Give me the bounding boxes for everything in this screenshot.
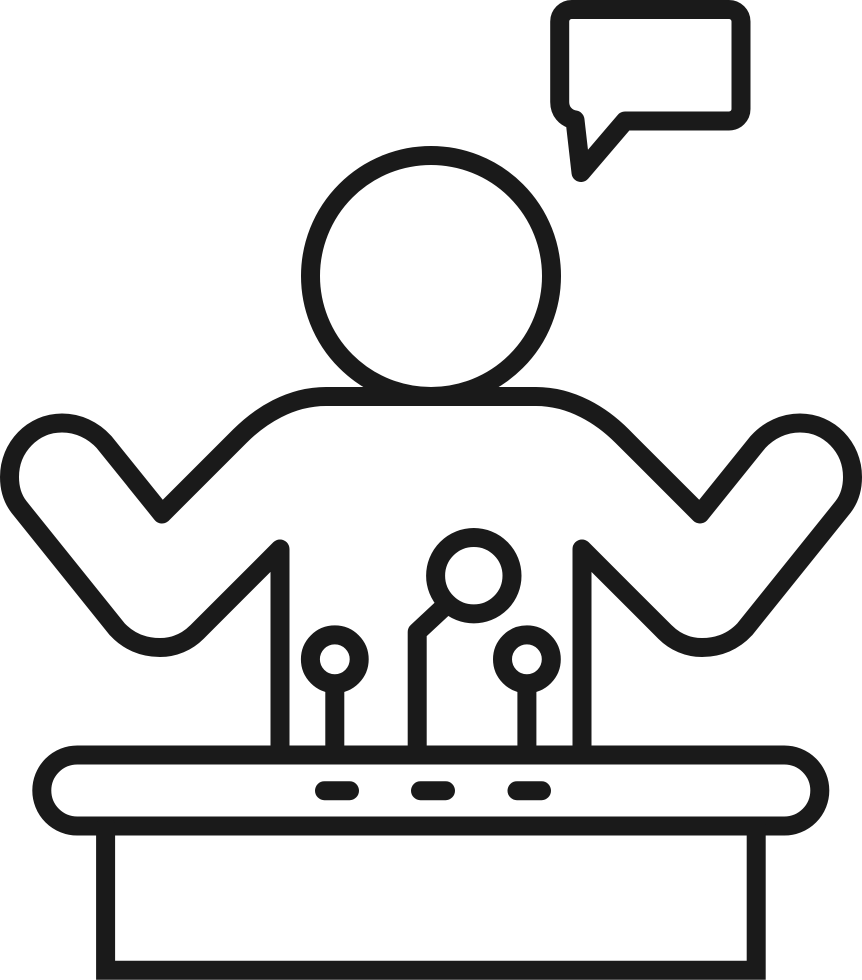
podium base — [106, 826, 756, 970]
icon: speech bubble — [560, 10, 741, 172]
center microphone — [417, 538, 512, 750]
right microphone — [503, 635, 551, 750]
podium buttons — [324, 781, 542, 800]
head — [310, 156, 552, 396]
podium top — [42, 755, 820, 826]
left microphone — [310, 635, 359, 750]
body and arms — [10, 396, 852, 750]
